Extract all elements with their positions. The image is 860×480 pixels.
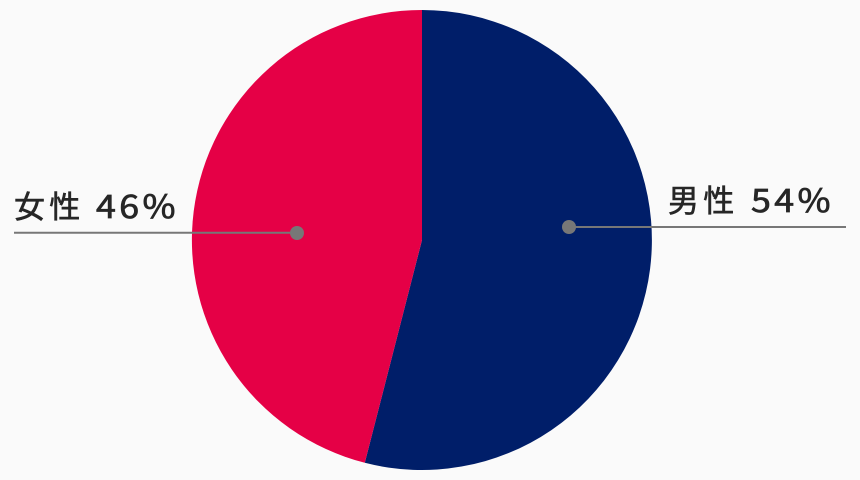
marker dot: male	[562, 220, 576, 234]
label: female 46%: 女性	[14, 182, 84, 227]
callout: female	[14, 181, 304, 240]
leader line: male	[569, 226, 846, 228]
leader line: female	[14, 232, 297, 234]
pie chart	[192, 10, 652, 470]
slice: female 46%	[192, 10, 422, 463]
marker dot: female	[290, 226, 304, 240]
label: male 54%: 男性	[668, 176, 738, 221]
callout: male	[562, 175, 846, 234]
label: female 46%: 46%	[96, 181, 179, 227]
label: female 46%	[14, 181, 179, 227]
label: male 54%	[668, 175, 834, 221]
slice: male 54%	[365, 10, 652, 470]
label: male 54%: 54%	[751, 175, 834, 221]
